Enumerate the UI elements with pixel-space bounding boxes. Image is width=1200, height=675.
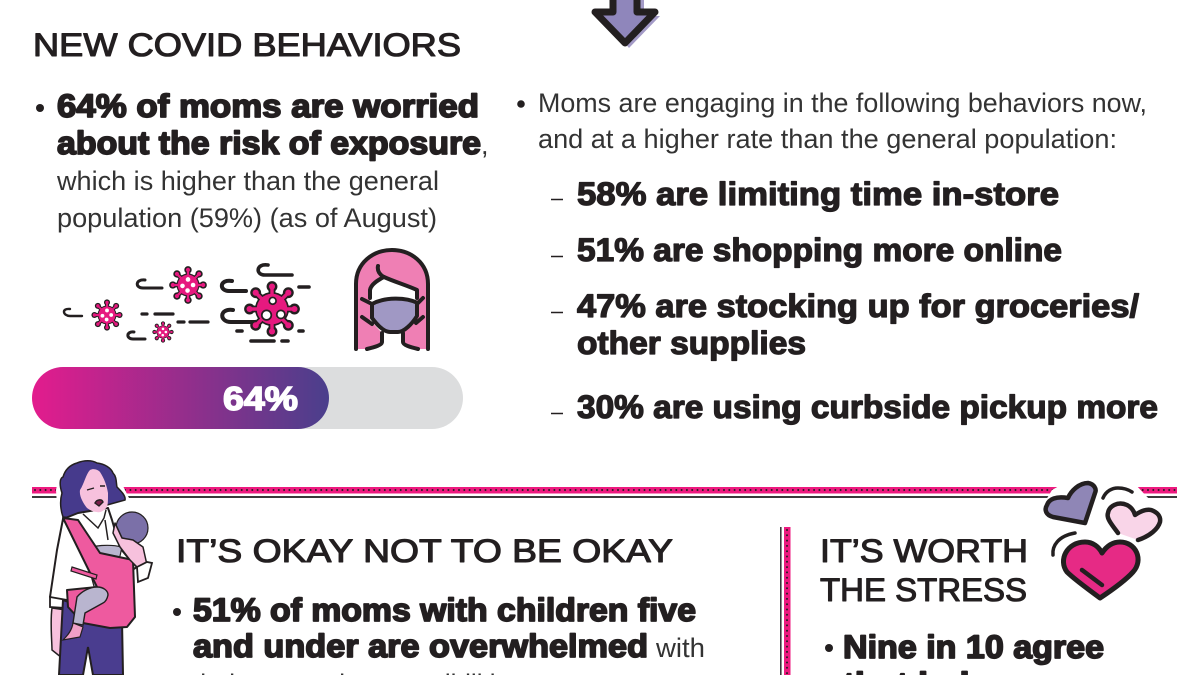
hair — [60, 461, 125, 518]
icon: three hearts — [1040, 477, 1168, 606]
text block: 51% of moms overwhelmed: 51% of moms with children five — [193, 592, 696, 628]
icon: flying viruses — [64, 265, 309, 343]
collar — [83, 510, 108, 540]
baby torso — [84, 545, 122, 590]
progress bar: 64%: 64% — [223, 380, 298, 417]
shirt and arm — [50, 508, 137, 607]
carrier — [63, 518, 135, 628]
text block: 64% of moms worried: , — [481, 130, 489, 160]
list: behavior percentages — [551, 176, 1158, 425]
text block: 51% of moms overwhelmed: and under are overwhelmed — [193, 628, 648, 664]
progress bar: 64% — [32, 367, 463, 429]
text block: nine in 10 agree: Nine in 10 agree — [843, 629, 1104, 665]
baby foot — [63, 623, 83, 640]
text block: 64% of moms worried: population (59%) (as of August) — [57, 203, 437, 233]
white halo — [1040, 477, 1168, 606]
text block: 51% of moms overwhelmed: with — [655, 633, 705, 663]
baby leg — [73, 587, 108, 625]
right cuff — [137, 562, 152, 582]
heading: it's okay not to be okay: IT’S OKAY NOT TO BE OKAY — [176, 533, 673, 569]
pants — [59, 600, 123, 675]
text block: moms behaviors intro — [517, 88, 1147, 154]
text block: 51% of moms overwhelmed — [173, 592, 705, 675]
baby head — [116, 512, 148, 544]
vertical divider — [780, 527, 790, 675]
white halo behind figure — [56, 458, 156, 600]
text block: moms behaviors intro: Moms are engaging in the following behaviors now, — [538, 88, 1147, 118]
cuff — [50, 597, 67, 608]
face — [80, 469, 108, 512]
heading: new covid behaviors: NEW COVID BEHAVIORS — [33, 27, 461, 63]
hand — [51, 608, 67, 658]
list: behavior percentages: 51% are shopping more online — [577, 232, 1062, 268]
horizontal divider — [32, 487, 1177, 498]
list: behavior percentages: 47% are stocking up for groceries/ — [577, 288, 1139, 324]
text block: 64% of moms worried — [36, 88, 489, 233]
text block: 64% of moms worried: which is higher than the general — [56, 166, 439, 196]
text block: moms behaviors intro: and at a higher rate than the general population: — [538, 124, 1117, 154]
list: behavior percentages: 58% are limiting time in-store — [577, 176, 1059, 212]
text block: nine in 10 agree — [825, 629, 1104, 675]
list: behavior percentages: 30% are using curbside pickup more — [577, 389, 1158, 425]
heading: it's worth the stress: THE STRESS — [820, 572, 1027, 608]
icon: down arrow — [595, 0, 660, 48]
text block: 64% of moms worried: about the risk of exposure — [57, 125, 481, 161]
mother's hand — [113, 523, 147, 567]
illustration: tired mom carrying baby — [50, 458, 156, 675]
heading: it's worth the stress: IT’S WORTH — [820, 533, 1028, 569]
text block: 64% of moms worried: 64% of moms are worried — [57, 88, 479, 124]
heading: it's worth the stress — [820, 533, 1028, 608]
icon: woman wearing mask — [356, 250, 428, 349]
list: behavior percentages: other supplies — [577, 325, 806, 361]
